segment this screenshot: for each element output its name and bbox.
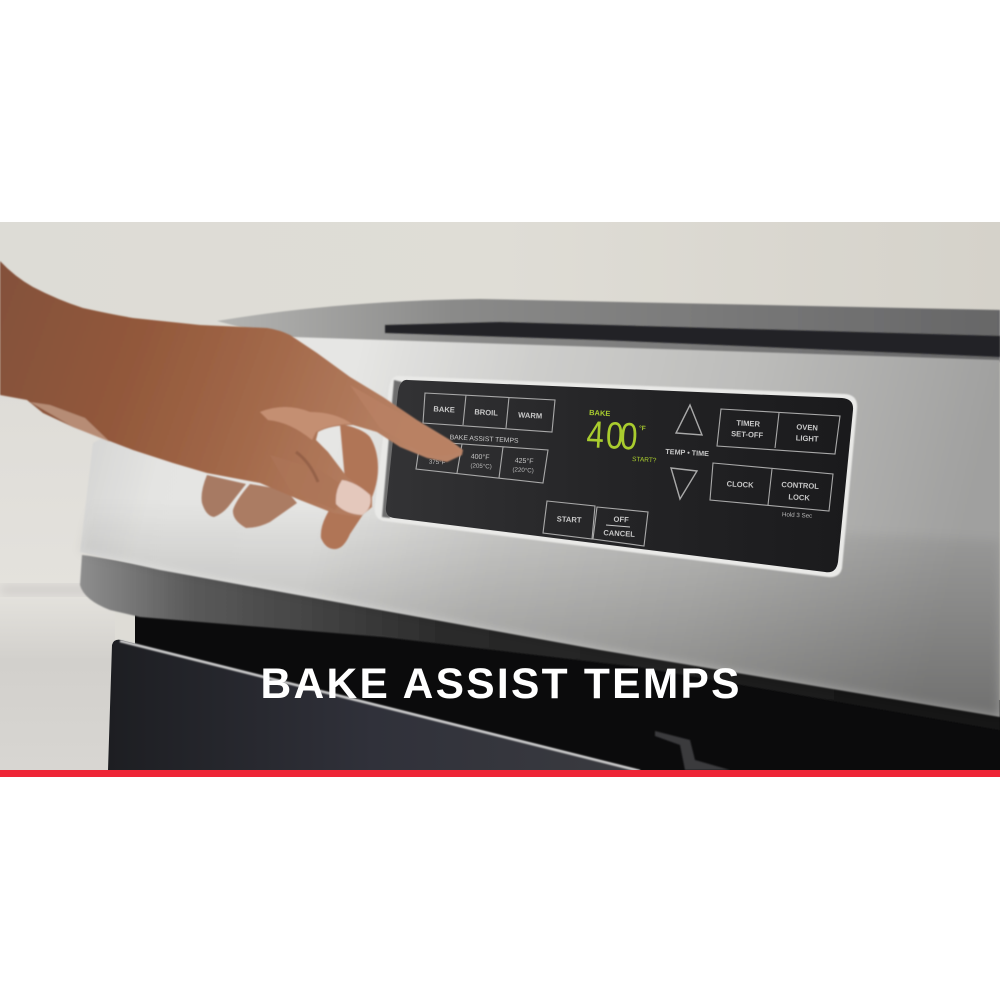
thumb nail	[336, 480, 371, 515]
oven door drawer	[108, 640, 640, 770]
underside highlight	[30, 402, 110, 442]
start button: START	[557, 514, 582, 525]
temp up arrow	[676, 405, 702, 435]
curled middle finger	[321, 424, 378, 549]
clock and control lock buttons: CONTROL	[781, 480, 819, 491]
bake assist temps label: BAKE ASSIST TEMPS	[449, 434, 519, 445]
temperature preset buttons: (220°C)	[512, 466, 534, 475]
knuckle shadow	[296, 452, 318, 482]
off cancel button: OFF	[613, 515, 629, 524]
display panel	[386, 380, 853, 572]
thumb finger highlight	[270, 455, 350, 510]
temp time label: TEMP • TIME	[665, 447, 709, 458]
oven dark trim line	[385, 322, 1000, 357]
clock and control lock buttons: CLOCK	[726, 479, 754, 490]
door hinge detail	[655, 731, 730, 770]
clock and control lock buttons	[710, 463, 833, 520]
chrome inner bezel	[382, 380, 402, 518]
temperature preset buttons: 400°F	[471, 453, 490, 461]
heading: BAKE ASSIST TEMPS	[260, 661, 740, 708]
palm crease highlight	[260, 407, 352, 440]
hand and arm	[0, 261, 463, 517]
bake broil warm buttons: WARM	[518, 410, 542, 421]
off cancel button: CANCEL	[603, 528, 636, 539]
panel labels and controls	[416, 393, 840, 546]
red accent bar	[0, 770, 1000, 777]
wall background	[0, 222, 1000, 770]
clock and control lock buttons: LOCK	[788, 492, 811, 503]
photo: oven control panel scene	[0, 222, 1000, 771]
temp down arrow	[671, 468, 697, 499]
timer and oven light buttons: LIGHT	[796, 433, 819, 444]
lower black cavity	[135, 610, 1000, 770]
drawer highlight stripe	[120, 641, 640, 771]
temperature preset buttons	[416, 441, 548, 483]
timer and oven light buttons	[717, 409, 840, 454]
timer and oven light buttons: OVEN	[796, 422, 818, 433]
third finger	[202, 475, 246, 517]
timer and oven light buttons: TIMER	[736, 418, 761, 429]
temperature preset buttons: (205°C)	[470, 462, 492, 471]
hand pressing button	[0, 261, 463, 549]
oven temperature readout: BAKE	[589, 408, 611, 418]
clock and control lock buttons: Hold 3 Sec	[782, 511, 812, 520]
oven temperature readout: 4 00	[586, 414, 638, 458]
steel lip shadow band	[80, 555, 1000, 730]
oven temperature readout	[586, 408, 657, 464]
bake broil warm buttons: BAKE	[433, 404, 455, 415]
start button	[543, 501, 595, 539]
bake broil warm buttons: BROIL	[474, 407, 499, 418]
display panel bezel	[375, 376, 857, 577]
off cancel button	[593, 507, 648, 546]
index finger highlight	[354, 388, 356, 391]
fourth finger	[233, 484, 297, 528]
temperature preset buttons: 375°F	[429, 459, 446, 466]
stainless steel control panel	[80, 337, 1000, 717]
timer and oven light buttons: SET-OFF	[731, 429, 764, 440]
temperature preset buttons: 425°F	[515, 457, 534, 465]
oven temperature readout: START?	[632, 456, 657, 464]
oven temperature readout: °F	[639, 424, 646, 432]
bake broil warm buttons	[423, 393, 555, 432]
oven top trim	[217, 299, 1000, 362]
